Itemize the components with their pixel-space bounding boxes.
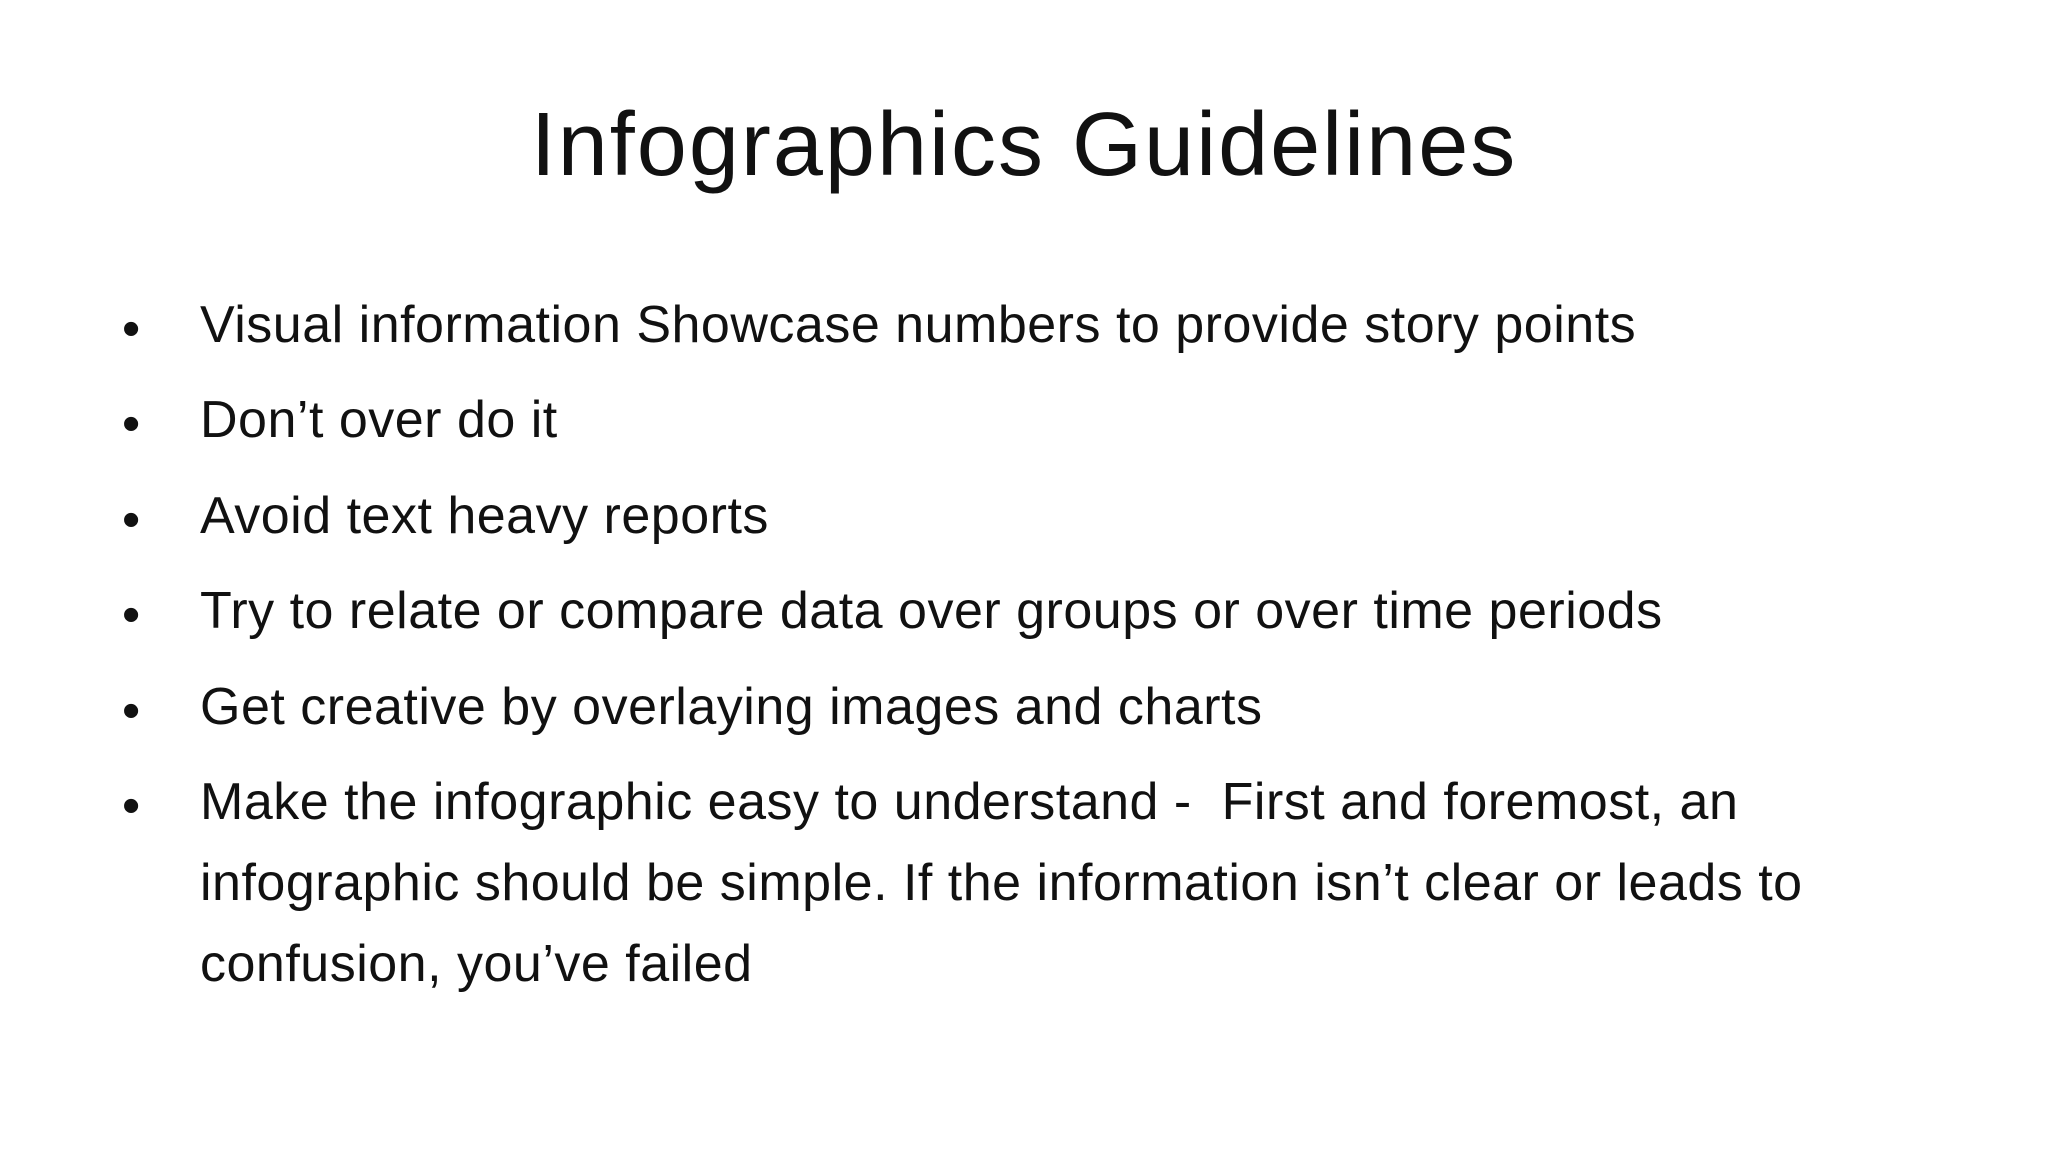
bullet 3: • <box>122 491 141 549</box>
bullet 2: • <box>122 395 141 453</box>
bullet 6: Make the infographic easy to understand - First and foremost, an <box>200 773 1738 831</box>
bullet 6: confusion, you’ve failed <box>200 935 753 993</box>
bullet 3: Avoid text heavy reports <box>200 487 769 545</box>
title: Infographics Guidelines <box>531 95 1517 195</box>
bullet 6: infographic should be simple. If the information isn’t clear or leads to <box>200 854 1803 912</box>
bullet 6 <box>122 773 1803 993</box>
bullet 5: • <box>122 682 141 740</box>
bullet 5: Get creative by overlaying images and charts <box>200 678 1263 736</box>
bullet 4: • <box>122 586 141 644</box>
bullet 2: Don’t over do it <box>200 391 558 449</box>
bullet 4: Try to relate or compare data over groups or over time periods <box>200 582 1663 640</box>
bullet 1: • <box>122 300 141 358</box>
bullet 1: Visual information Showcase numbers to provide story points <box>200 296 1636 354</box>
bullet 6: • <box>122 777 141 835</box>
